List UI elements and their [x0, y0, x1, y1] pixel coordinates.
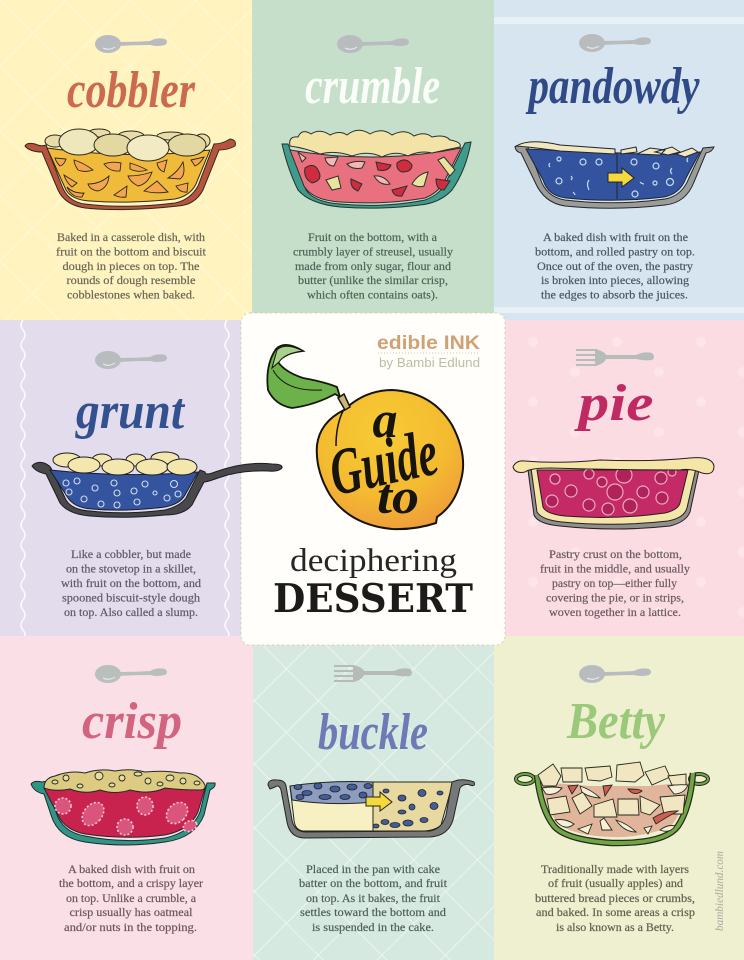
icon: spoon — [95, 351, 167, 369]
icon: spoon — [337, 35, 409, 53]
text block: cobbler description: dough in pieces on top. The — [62, 259, 200, 273]
illustration: buckle pan — [268, 780, 474, 838]
text block: pandowdy description: Once out of the oven, the pastry — [537, 259, 693, 273]
credit: website: bambiedlund.com — [712, 851, 726, 931]
panel: crumble — [252, 0, 494, 321]
text block: crisp description: A baked dish with fruit on — [68, 862, 195, 876]
logo: edible INK: by Bambi Edlund — [379, 355, 480, 370]
logo: edible INK: edible INK — [377, 333, 480, 354]
text block: buckle description — [299, 862, 448, 934]
illustration: crisp dish — [31, 770, 215, 845]
panel: center title card — [241, 313, 505, 645]
heading: cobbler: cobbler — [67, 62, 196, 119]
icon: spoon — [95, 665, 167, 683]
text block: pandowdy description: bottom, and rolled pastry on top. — [535, 244, 695, 258]
text block: crumble description: which often contains oats). — [307, 288, 438, 302]
text: a Guide to: Guide — [323, 416, 444, 510]
text block: grunt description: with fruit on the bottom, and — [61, 576, 201, 590]
panel: pie — [503, 320, 744, 636]
text block: pie description: woven together in a lattice. — [549, 605, 681, 619]
text block: crisp description: and/or nuts in the topping. — [64, 920, 197, 934]
text block: pie description: Pastry crust on the bottom, — [549, 547, 682, 561]
text block: buckle description: is suspended in the cake. — [312, 920, 434, 934]
text block: pie description: fruit in the middle, and usually — [540, 562, 690, 576]
text block: Betty description: is also known as a Betty. — [556, 920, 674, 934]
icon: peach — [317, 390, 463, 529]
icon: yellow arrow — [366, 792, 392, 811]
text: a Guide to: to — [377, 468, 419, 524]
icon: fork — [334, 665, 412, 682]
text block: buckle description: settles toward the bottom and — [300, 905, 446, 919]
text block: Betty description — [535, 862, 695, 934]
icon: leaf — [267, 345, 340, 408]
text: a Guide to: a — [372, 392, 398, 449]
text block: crumble description: Fruit on the bottom, with a — [308, 230, 438, 244]
heading: grunt: grunt — [75, 383, 185, 440]
text block: cobbler description: rounds of dough resemble — [66, 273, 196, 287]
text block: pie description — [540, 547, 690, 619]
text block: pandowdy description: the edges to absorb the juices. — [541, 288, 688, 302]
text block: grunt description: Like a cobbler, but made — [71, 547, 191, 561]
text block: buckle description: batter on the bottom, and fruit — [299, 876, 448, 890]
heading: DESSERT: DESSERT — [273, 576, 473, 622]
text block: grunt description: on top. Also called a slump. — [64, 605, 198, 619]
illustration: cobbler dish — [25, 129, 235, 210]
text block: pie description: pastry on top—either fully — [552, 576, 677, 590]
panel: Betty — [494, 636, 744, 960]
text block: pandowdy description: A baked dish with fruit on the — [543, 230, 688, 244]
panel: pandowdy — [494, 0, 744, 321]
icon: yellow arrow — [608, 168, 634, 187]
heading: crumble: crumble — [305, 58, 440, 115]
text block: buckle description: Placed in the pan with cake — [306, 862, 440, 876]
icon: fork — [576, 349, 654, 366]
text block: crumble description: crumbly layer of streusel, usually — [293, 244, 453, 258]
illustration: pandowdy dish — [515, 142, 714, 208]
text block: pandowdy description — [535, 230, 695, 302]
text block: crisp description: crisp usually has oatmeal — [70, 905, 193, 919]
text block: cobbler description: cobblestones when baked. — [67, 288, 195, 302]
text block: Betty description: buttered bread pieces or crumbs, — [535, 891, 695, 905]
illustration: crumble dish — [282, 130, 471, 208]
illustration: pie dish — [513, 458, 714, 529]
text block: pie description: covering the pie, or in strips, — [546, 590, 684, 604]
panel: cobbler — [0, 0, 253, 321]
icon: spoon — [579, 34, 651, 52]
heading: buckle: buckle — [318, 704, 428, 761]
panel: crisp — [0, 636, 253, 960]
text block: crisp description: on top. Unlike a crumble, a — [66, 891, 197, 905]
text: a Guide to — [323, 392, 444, 524]
heading: deciphering: deciphering — [290, 543, 457, 579]
text block: Betty description: of fruit (usually apples) and — [548, 876, 683, 890]
text block: crumble description: made from only sugar, flour and — [295, 259, 451, 273]
text block: grunt description — [61, 547, 201, 619]
text block: cobbler description — [56, 230, 207, 302]
heading: Betty: Betty — [566, 693, 666, 750]
icon: spoon — [95, 35, 167, 53]
text block: crumble description: butter (unlike the similar crisp, — [298, 273, 448, 287]
text block: crisp description — [59, 862, 203, 934]
heading: pie: pie — [574, 375, 654, 432]
text block: Betty description: and baked. In some areas a crisp — [536, 905, 695, 919]
icon: spoon — [579, 665, 651, 683]
illustration: Betty dish — [516, 762, 708, 843]
text block: grunt description: on the stovetop in a skillet, — [66, 562, 196, 576]
text block: grunt description: spooned biscuit-style dough — [62, 590, 200, 604]
text block: cobbler description: fruit on the bottom and biscuit — [56, 244, 207, 258]
text block: Betty description: Traditionally made with layers — [541, 862, 689, 876]
illustration: grunt skillet — [32, 452, 282, 517]
logo: edible INK — [377, 333, 480, 370]
panel: grunt — [0, 320, 244, 636]
text block: pandowdy description: is broken into pieces, allowing — [541, 273, 689, 287]
panel: buckle — [253, 636, 494, 960]
heading: crisp: crisp — [82, 693, 182, 750]
text block: crumble description — [293, 230, 453, 302]
text block: cobbler description: Baked in a casserole dish, with — [57, 230, 205, 244]
heading: pandowdy: pandowdy — [525, 58, 700, 115]
text block: crisp description: the bottom, and a crispy layer — [59, 876, 203, 890]
text block: buckle description: on top. As it bakes, the fruit — [306, 891, 441, 905]
